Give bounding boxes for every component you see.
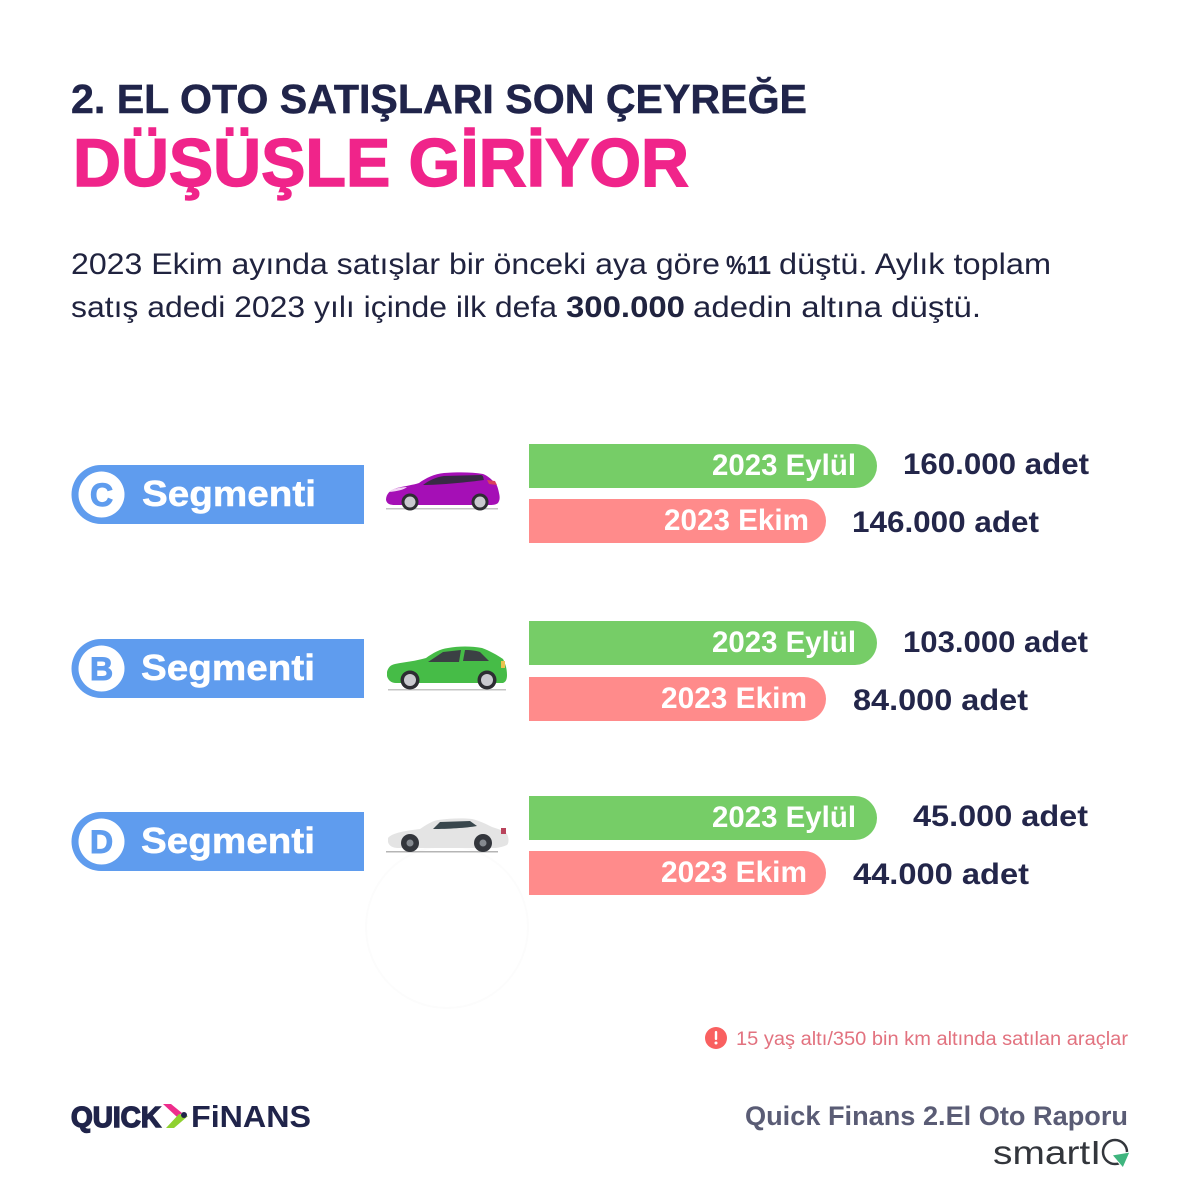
bar: 2023 Ekim — [529, 677, 826, 721]
title: DÜŞÜŞLE GİRİYOR — [73, 125, 689, 201]
intro text: %11 — [726, 250, 771, 280]
bar: 2023 Eylül — [529, 621, 877, 665]
label: C Segmenti: C — [90, 477, 113, 513]
value: 84.000 adet: 84.000 adet — [853, 684, 1028, 717]
label: D Segmenti: D — [90, 824, 113, 860]
label: D Segmenti: Segmenti — [141, 820, 315, 861]
segment row: D — [72, 796, 1088, 895]
label: C Segmenti: Segmenti — [142, 473, 316, 514]
title: 2. EL OTO SATIŞLARI SON ÇEYREĞE — [71, 76, 807, 122]
icon: green hatchback car — [387, 646, 507, 690]
bar: 2023 Ekim: 2023 Ekim — [664, 504, 809, 537]
logo: Quick Finans: QUICK — [71, 1102, 161, 1134]
bar: 2023 Ekim: 2023 Ekim — [661, 856, 807, 889]
logo: smartIQ — [993, 1134, 1130, 1171]
footnote — [705, 1027, 1129, 1050]
label: D Segmenti — [72, 812, 364, 871]
value: 103.000 adet: 103.000 adet — [903, 626, 1088, 659]
logo: smartIQ: smartI — [993, 1134, 1101, 1171]
segment row: B — [72, 621, 1088, 721]
logo: Quick Finans — [71, 1099, 311, 1134]
bar: 2023 Eylül: 2023 Eylül — [712, 801, 856, 834]
intro text: 2023 Ekim ayında satışlar bir önceki aya göre — [71, 248, 720, 281]
bar: 2023 Eylül — [529, 444, 877, 488]
bar: 2023 Ekim: 2023 Ekim — [661, 682, 807, 715]
bar: 2023 Eylül: 2023 Eylül — [712, 449, 856, 482]
footnote text: 15 yaş altı/350 bin km altında satılan araçlar — [736, 1029, 1129, 1050]
icon: purple hatchback car — [386, 472, 500, 510]
value: 160.000 adet: 160.000 adet — [903, 448, 1089, 481]
bar: 2023 Ekim — [529, 851, 826, 895]
intro text: satış adedi 2023 yılı içinde ilk defa — [71, 291, 557, 324]
label: B Segmenti: B — [90, 651, 113, 687]
label: B Segmenti: Segmenti — [141, 647, 315, 688]
intro text: 300.000 — [566, 291, 685, 324]
intro text: adedin altına düştü. — [693, 291, 981, 324]
intro text: düştü. Aylık toplam — [779, 248, 1051, 281]
label: B Segmenti — [72, 639, 364, 698]
title — [71, 76, 807, 201]
value: 146.000 adet: 146.000 adet — [852, 506, 1039, 539]
value: 44.000 adet: 44.000 adet — [853, 858, 1029, 891]
bar: 2023 Eylül: 2023 Eylül — [712, 626, 856, 659]
icon: white sedan car — [386, 818, 508, 852]
bar: 2023 Ekim — [529, 499, 826, 543]
logo: Quick Finans: FiNANS — [191, 1099, 311, 1134]
segment row: C — [72, 444, 1089, 543]
icon: warning — [705, 1027, 727, 1049]
intro text — [71, 248, 1051, 324]
bar: 2023 Eylül — [529, 796, 877, 840]
label: C Segmenti — [72, 465, 364, 524]
value: 45.000 adet: 45.000 adet — [913, 800, 1088, 833]
report title: Quick Finans 2.El Oto Raporu — [745, 1101, 1128, 1131]
